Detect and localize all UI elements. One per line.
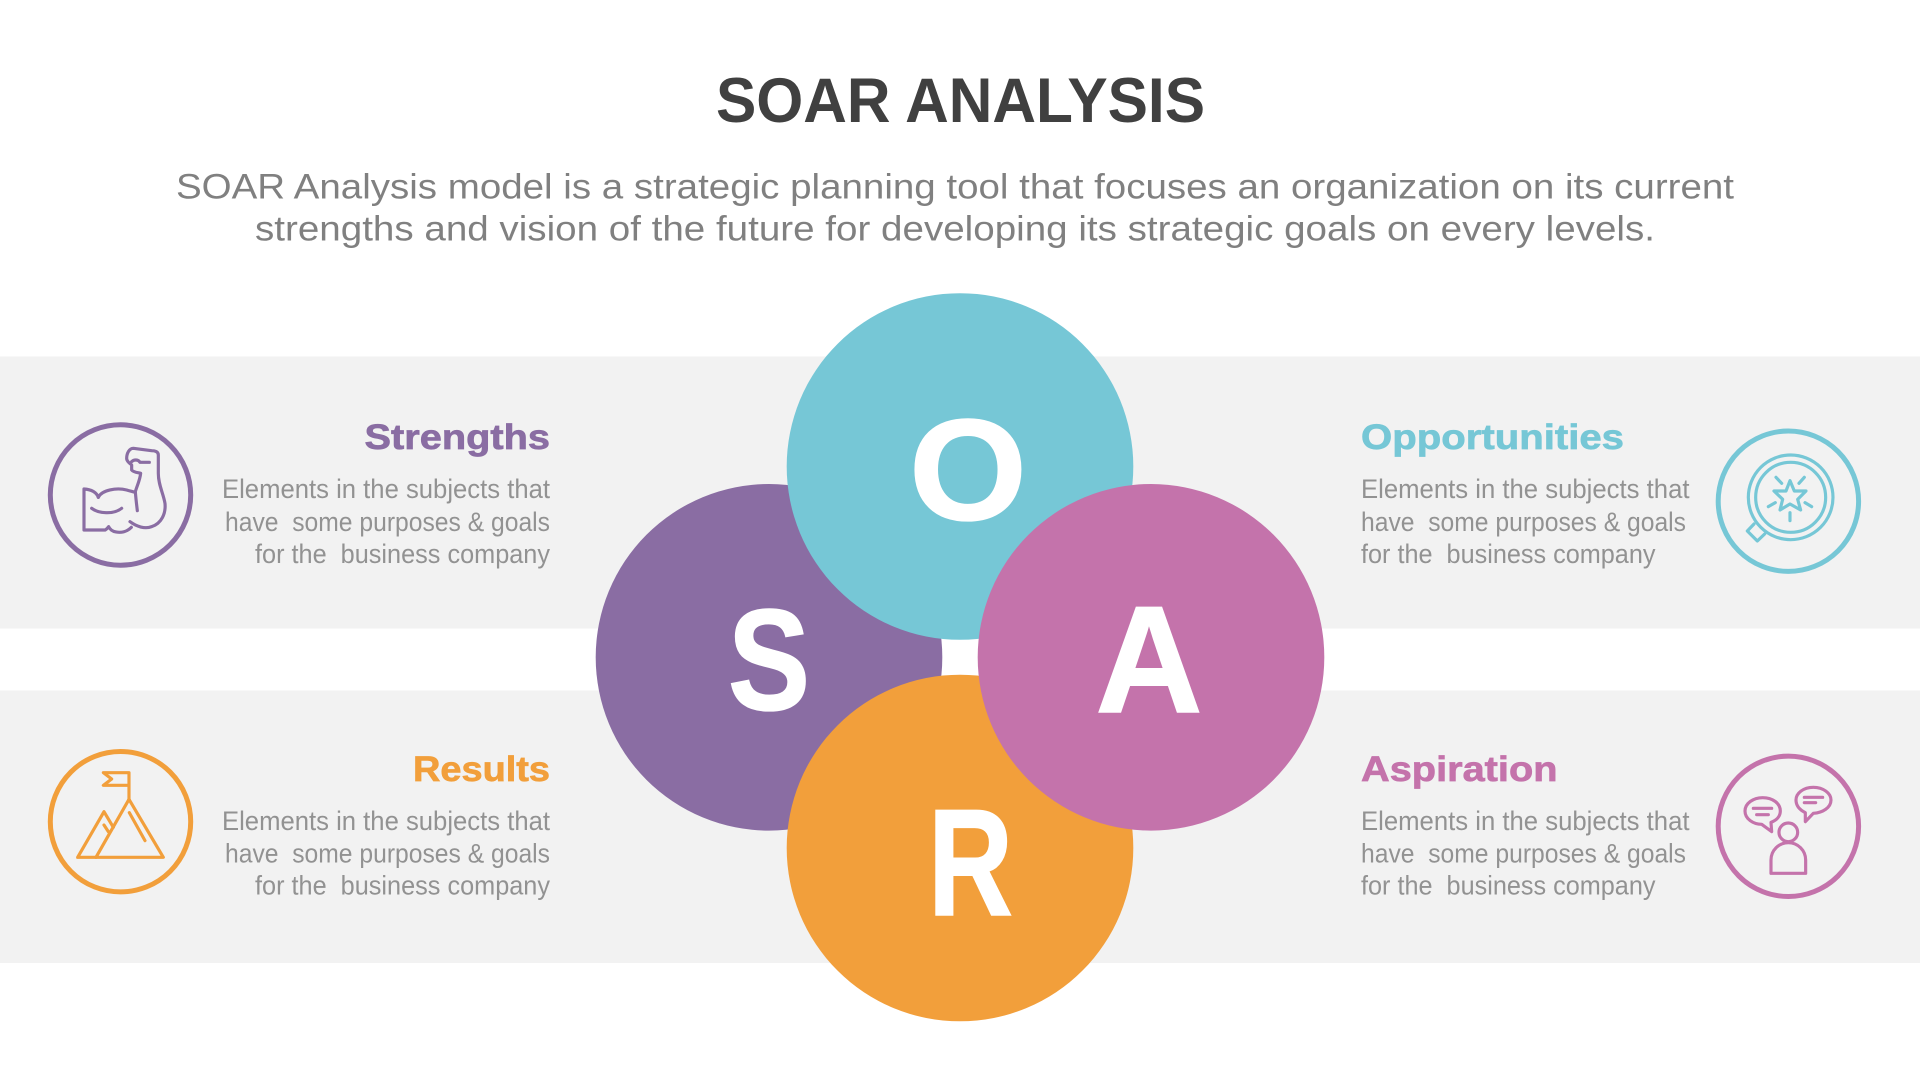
text block: results description xyxy=(222,806,551,900)
subtitle text block xyxy=(176,168,1734,248)
icon: flexed arm in circle xyxy=(50,425,191,565)
subtitle text block: SOAR Analysis model is a strategic planning tool that focuses an organization on its current xyxy=(176,168,1734,206)
panel: top grey band xyxy=(0,356,1920,628)
heading: Strengths: Strengths xyxy=(364,417,550,457)
text block: aspiration description xyxy=(1361,806,1690,900)
circle: R: R xyxy=(928,778,1013,948)
text block: opportunities description: for the business company xyxy=(1361,539,1656,569)
text block: strengths description: have some purposes & goals xyxy=(225,507,550,537)
text block: opportunities description: have some purposes & goals xyxy=(1361,507,1686,537)
heading: Results: Results xyxy=(413,749,550,789)
panel: results xyxy=(50,749,551,900)
text block: strengths description xyxy=(222,474,551,569)
icon: mountain with flag in circle xyxy=(50,752,191,892)
text block: opportunities description: Elements in the subjects that xyxy=(1361,474,1690,504)
circle: A: A xyxy=(1096,575,1202,745)
circle: A xyxy=(978,484,1324,831)
circle: R xyxy=(787,675,1133,1021)
text block: strengths description: Elements in the subjects that xyxy=(222,474,551,504)
circle: O: O xyxy=(909,390,1027,550)
text block: aspiration description: for the business company xyxy=(1361,870,1656,900)
panel: opportunities xyxy=(1361,417,1859,571)
text block: results description: for the business company xyxy=(255,870,551,900)
icon: person with speech bubbles in circle xyxy=(1718,756,1859,896)
icon: magnifier with star in circle xyxy=(1718,431,1859,571)
circle: S: S xyxy=(728,580,810,740)
subtitle text block: strengths and vision of the future for developing its strategic goals on every levels. xyxy=(255,210,1655,248)
text block: aspiration description: Elements in the subjects that xyxy=(1361,806,1690,836)
chart: four overlapping SOAR circles xyxy=(596,293,1324,1021)
text block: aspiration description: have some purposes & goals xyxy=(1361,838,1686,868)
panel: aspiration xyxy=(1361,749,1859,900)
heading: Aspiration: Aspiration xyxy=(1361,749,1558,789)
text block: results description: Elements in the subjects that xyxy=(222,806,551,836)
heading: Opportunities: Opportunities xyxy=(1361,417,1624,457)
text block: opportunities description xyxy=(1361,474,1690,569)
circle: S xyxy=(596,484,942,831)
panel: bottom grey band xyxy=(0,690,1920,963)
text block: strengths description: for the business company xyxy=(255,539,551,569)
circle: O xyxy=(787,293,1133,640)
title: SOAR ANALYSIS xyxy=(716,66,1205,136)
panel: strengths xyxy=(50,417,551,569)
text block: results description: have some purposes & goals xyxy=(225,838,550,868)
